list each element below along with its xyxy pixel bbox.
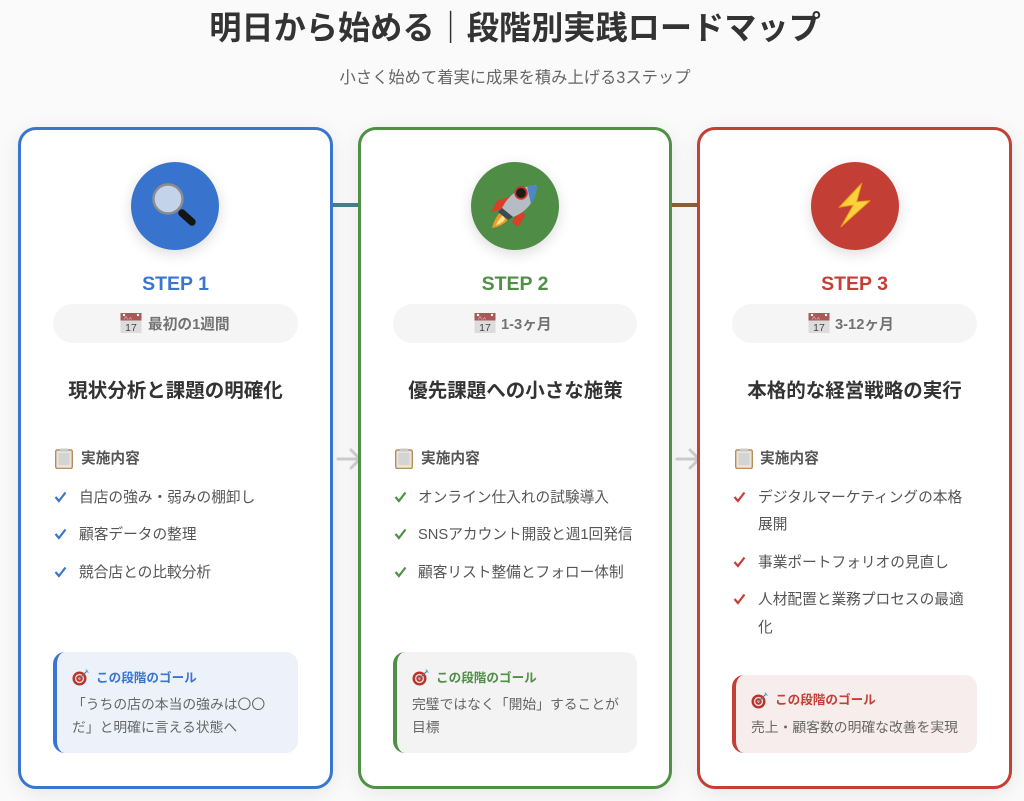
goal label: この段階のゴール [436,671,537,685]
goal text: 「うちの店の本当の強みは〇〇 [72,697,265,712]
check icon [394,528,406,540]
checklist [734,489,964,636]
item: 事業ポートフォリオの見直し [758,555,949,571]
item: 人材配置と業務プロセスの最適 [758,592,964,608]
panel: step 1 [16,127,334,794]
step heading: 現状分析と課題の明確化 [68,380,283,402]
goal label: この段階のゴール [775,693,876,707]
icon: target [752,692,768,708]
panel: step 2 [356,127,674,794]
item: 顧客データの整理 [79,527,197,543]
goal text: 目標 [412,720,440,735]
checklist [394,489,633,581]
icon: clipboard [55,448,73,469]
duration text: 最初の1週間 [148,317,230,333]
item: SNSアカウント開設と週1回発信 [418,527,633,543]
check icon [394,566,406,578]
check icon [394,492,406,503]
step heading: 本格的な経営戦略の実行 [747,380,962,402]
duration text: 3-12ヶ月 [835,317,894,333]
item continuation: 化 [758,620,773,636]
card frame [18,127,333,789]
icon: rocket [471,162,559,250]
step heading: 優先課題への小さな施策 [408,380,623,402]
icon: clipboard [395,448,413,469]
icon: calendar [808,313,830,333]
goal box [53,652,298,753]
arrow: step 2 to step 3 [676,448,697,470]
check icon [734,556,746,568]
item continuation: 展開 [758,517,787,533]
goal text: だ」と明確に言える状態へ [72,720,237,735]
card frame [358,127,672,789]
checklist [54,489,255,581]
step label: STEP 2 [482,273,548,295]
item: 競合店との比較分析 [79,565,211,581]
list heading: 実施内容 [81,451,140,467]
check icon [54,566,66,578]
icon: calendar [120,313,142,333]
step label: STEP 3 [821,273,888,295]
icon: target [72,670,89,686]
duration pill [393,304,637,343]
icon: target [412,670,429,686]
icon: calendar [474,313,496,333]
check icon [54,492,66,503]
check icon [734,492,746,503]
arrow: step 1 to step 2 [336,448,358,470]
item: オンライン仕入れの試験導入 [418,490,609,506]
list heading: 実施内容 [421,451,480,467]
goal label: この段階のゴール [96,671,197,685]
goal box [732,675,977,753]
connector line: step 2 to step 3 [669,202,701,206]
icon: clipboard [735,448,753,469]
card frame [697,127,1012,789]
subtitle: 小さく始めて着実に成果を積み上げる3ステップ [340,69,690,87]
item: 自店の強み・弱みの棚卸し [79,490,255,506]
list heading: 実施内容 [760,451,819,467]
check icon [54,528,66,540]
goal text: 完璧ではなく「開始」することが [412,697,619,712]
connector line: step 1 to step 2 [330,202,362,206]
icon: lightning bolt [811,162,899,250]
item: 顧客リスト整備とフォロー体制 [418,565,624,581]
duration pill [732,304,977,343]
item: デジタルマーケティングの本格 [758,490,962,506]
duration text: 1-3ヶ月 [501,317,552,333]
check icon [734,594,746,605]
duration pill [53,304,298,343]
goal box [393,652,637,753]
step label: STEP 1 [142,273,209,295]
icon: magnifier [131,162,219,250]
goal text: 売上・顧客数の明確な改善を実現 [751,720,958,735]
title: 明日から始める｜段階別実践ロードマップ [209,10,821,46]
